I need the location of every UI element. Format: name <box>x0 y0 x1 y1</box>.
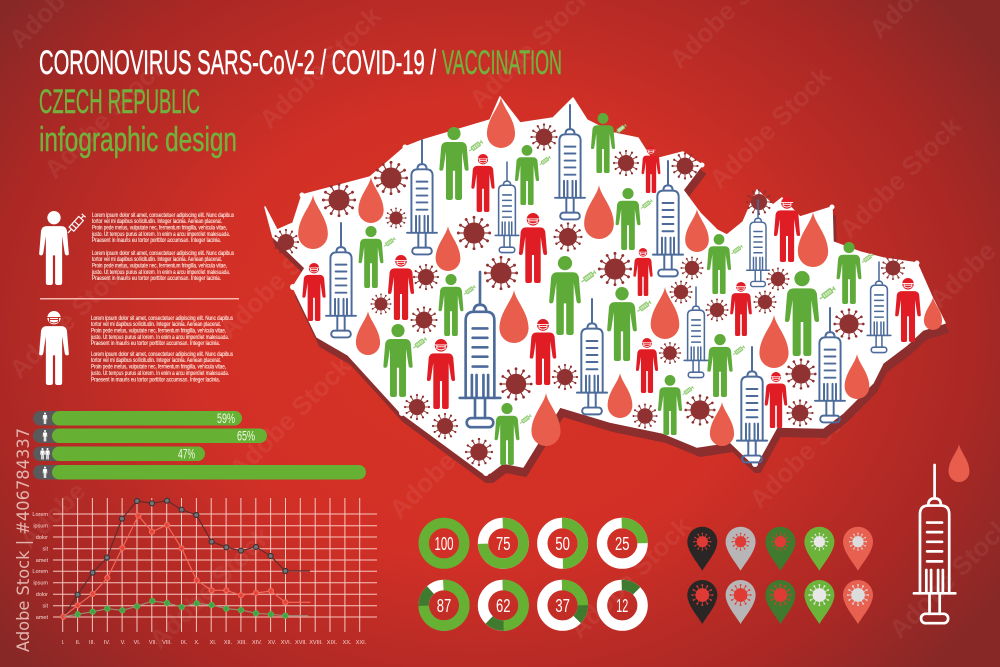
line chart: VIII. <box>162 640 172 646</box>
text block: protection: Lorem ipsum dolor sit amet, consectetuer adipiscing elit. Nunc dapibus <box>91 316 233 322</box>
donut 50: 50 <box>555 534 570 554</box>
donut 100: 100 <box>434 534 454 554</box>
text block: protection: Praesent in mauris eu tortor porttitor accumsan. Integer lacinia. <box>91 378 220 384</box>
text block: protection: Proin pede metus, vulputate nec, fermentum fringilla, vehicula vitae, <box>91 364 226 370</box>
donut 50 <box>542 523 583 564</box>
bar chart: percentages: 59% <box>217 410 235 426</box>
text block: protection: Lorem ipsum dolor sit amet, consectetuer adipiscing elit. Nunc dapibus <box>91 352 233 358</box>
title: VACCINATION <box>442 44 562 82</box>
bar chart: percentages <box>33 410 366 480</box>
line chart: XVII. <box>295 640 307 646</box>
title: CZECH REPUBLIC <box>39 83 200 121</box>
line chart: sit <box>42 546 48 552</box>
bar chart: percentages: 47% <box>178 446 195 462</box>
map: Czech Republic <box>265 97 945 476</box>
line chart: I. <box>61 640 65 646</box>
line chart: XIII. <box>237 640 247 646</box>
line chart: IX. <box>181 640 188 646</box>
vaccinated people on map <box>359 113 873 465</box>
icon: vaccinated person <box>39 211 86 285</box>
donut 12: 12 <box>616 596 628 616</box>
text block: protection: tortor vel mi dapibus sollicitudin. Integer lacinia. Aenean placerat. <box>91 358 221 364</box>
text block: vaccination: Praesent in mauris eu tortor porttitor accumsan. Integer lacinia. <box>92 276 221 282</box>
line chart: XIX. <box>327 640 338 646</box>
text block: vaccination: justo. Ut tempus purus at lorem. In enim a arcu imperdiet malesuada. <box>91 232 230 238</box>
viruses on map <box>273 123 905 466</box>
watermark pattern: Adobe Stock <box>383 390 517 524</box>
line chart: VII. <box>149 640 158 646</box>
vertical stock id: Adobe Stock | #406784337 <box>14 428 34 652</box>
watermark pattern: Adobe Stock <box>3 250 137 384</box>
line chart: ipsum <box>33 524 48 530</box>
text block: vaccination: Proin pede metus, vulputate nec, fermentum fringilla, vehicula vitae, <box>92 226 227 232</box>
map pins: top row <box>687 527 873 571</box>
title: CORONOVIRUS SARS-CoV-2 / COVID-19 / <box>39 44 436 82</box>
watermark pattern: Adobe Stock <box>703 60 837 194</box>
watermark pattern: Adobe Stock <box>38 50 172 184</box>
donut 75: 75 <box>496 534 511 554</box>
title <box>39 44 562 159</box>
line chart: VI. <box>134 640 141 646</box>
donut 12 <box>602 585 643 626</box>
text block: protection: justo. Ut tempus purus at lorem. In enim a arcu imperdiet malesuada. <box>90 371 229 377</box>
line chart: XX. <box>343 640 352 646</box>
watermark pattern: Adobe Stock <box>563 510 697 644</box>
donut 25: 25 <box>615 534 630 554</box>
line chart: sit <box>42 604 48 610</box>
text block: vaccination: Lorem ipsum dolor sit amet, consectetuer adipiscing elit. Nunc dapibus <box>92 213 234 219</box>
donut 87: 87 <box>437 596 451 616</box>
icon: large white syringe <box>914 465 955 623</box>
map shadow <box>268 106 948 482</box>
text block: protection <box>90 316 233 384</box>
blood drops on map <box>298 97 942 446</box>
line chart: Lorem <box>32 512 48 518</box>
text block: vaccination: tortor vel mi dapibus sollicitudin. Integer lacinia. Aenean placerat. <box>92 219 222 225</box>
line chart: X. <box>194 640 200 646</box>
watermark pattern: Adobe Stock <box>143 520 277 654</box>
line chart: III. <box>89 640 96 646</box>
text block: protection: tortor vel mi dapibus sollicitudin. Integer lacinia. Aenean placerat. <box>91 322 221 328</box>
donut 37 <box>542 585 583 626</box>
donut 100 <box>424 523 464 564</box>
line chart: dolor <box>36 592 48 598</box>
donut charts <box>424 523 643 626</box>
line chart: XIV. <box>252 640 262 646</box>
watermark pattern: Adobe Stock <box>223 350 357 484</box>
text block: protection: justo. Ut tempus purus at lorem. In enim a arcu imperdiet malesuada. <box>90 335 229 341</box>
map pins: bottom row <box>687 580 873 624</box>
line chart: dolor <box>36 535 48 541</box>
donut 62 <box>483 585 524 626</box>
watermark pattern: Adobe <box>13 476 91 554</box>
text block: protection: Proin pede metus, vulputate nec, fermentum fringilla, vehicula vitae, <box>91 328 226 334</box>
syringes on map <box>326 105 891 462</box>
watermark pattern: Adobe Stock <box>833 110 967 244</box>
line chart: IV. <box>104 640 111 646</box>
line chart: XI. <box>210 640 217 646</box>
line chart <box>32 498 377 646</box>
line chart: amet <box>36 558 48 564</box>
icon: blood drop <box>949 444 969 482</box>
line chart: XXI. <box>356 640 367 646</box>
line chart: XV. <box>268 640 277 646</box>
donut 25 <box>602 523 643 564</box>
icon: masked person <box>39 311 69 385</box>
text block: vaccination: tortor vel mi dapibus sollicitudin. Integer lacinia. Aenean placerat. <box>92 257 222 263</box>
watermark pattern: Adobe Stock <box>743 380 877 514</box>
donut 87 <box>424 585 464 626</box>
text block: vaccination: Proin pede metus, vulputate nec, fermentum fringilla, vehicula vitae, <box>92 264 227 270</box>
donut 62: 62 <box>496 596 511 616</box>
donut 37: 37 <box>555 596 570 616</box>
line chart: amet <box>36 615 48 621</box>
line chart: Lorem <box>32 569 48 575</box>
text block: vaccination: justo. Ut tempus purus at lorem. In enim a arcu imperdiet malesuada. <box>91 270 230 276</box>
line chart: V. <box>121 640 126 646</box>
title: infographic design <box>39 121 237 159</box>
text block: vaccination <box>91 213 234 282</box>
line chart: XVI. <box>281 640 292 646</box>
watermark pattern: Adobe Stock <box>213 210 347 344</box>
text block: vaccination: Lorem ipsum dolor sit amet, consectetuer adipiscing elit. Nunc dapibus <box>92 251 234 257</box>
text block: vaccination: Praesent in mauris eu tortor porttitor accumsan. Integer lacinia. <box>92 238 221 244</box>
bar chart: percentages: 65% <box>237 428 255 444</box>
watermark pattern: Adobe <box>923 236 1000 314</box>
line chart: II. <box>76 640 81 646</box>
line chart: XVIII. <box>309 640 323 646</box>
line chart: XII. <box>224 640 233 646</box>
masked people on map <box>302 146 921 428</box>
donut 75 <box>483 523 524 564</box>
text block: protection: Praesent in mauris eu tortor porttitor accumsan. Integer lacinia. <box>91 341 220 347</box>
watermark pattern: Adobe Stock <box>253 0 387 134</box>
line chart: ipsum <box>33 580 48 586</box>
